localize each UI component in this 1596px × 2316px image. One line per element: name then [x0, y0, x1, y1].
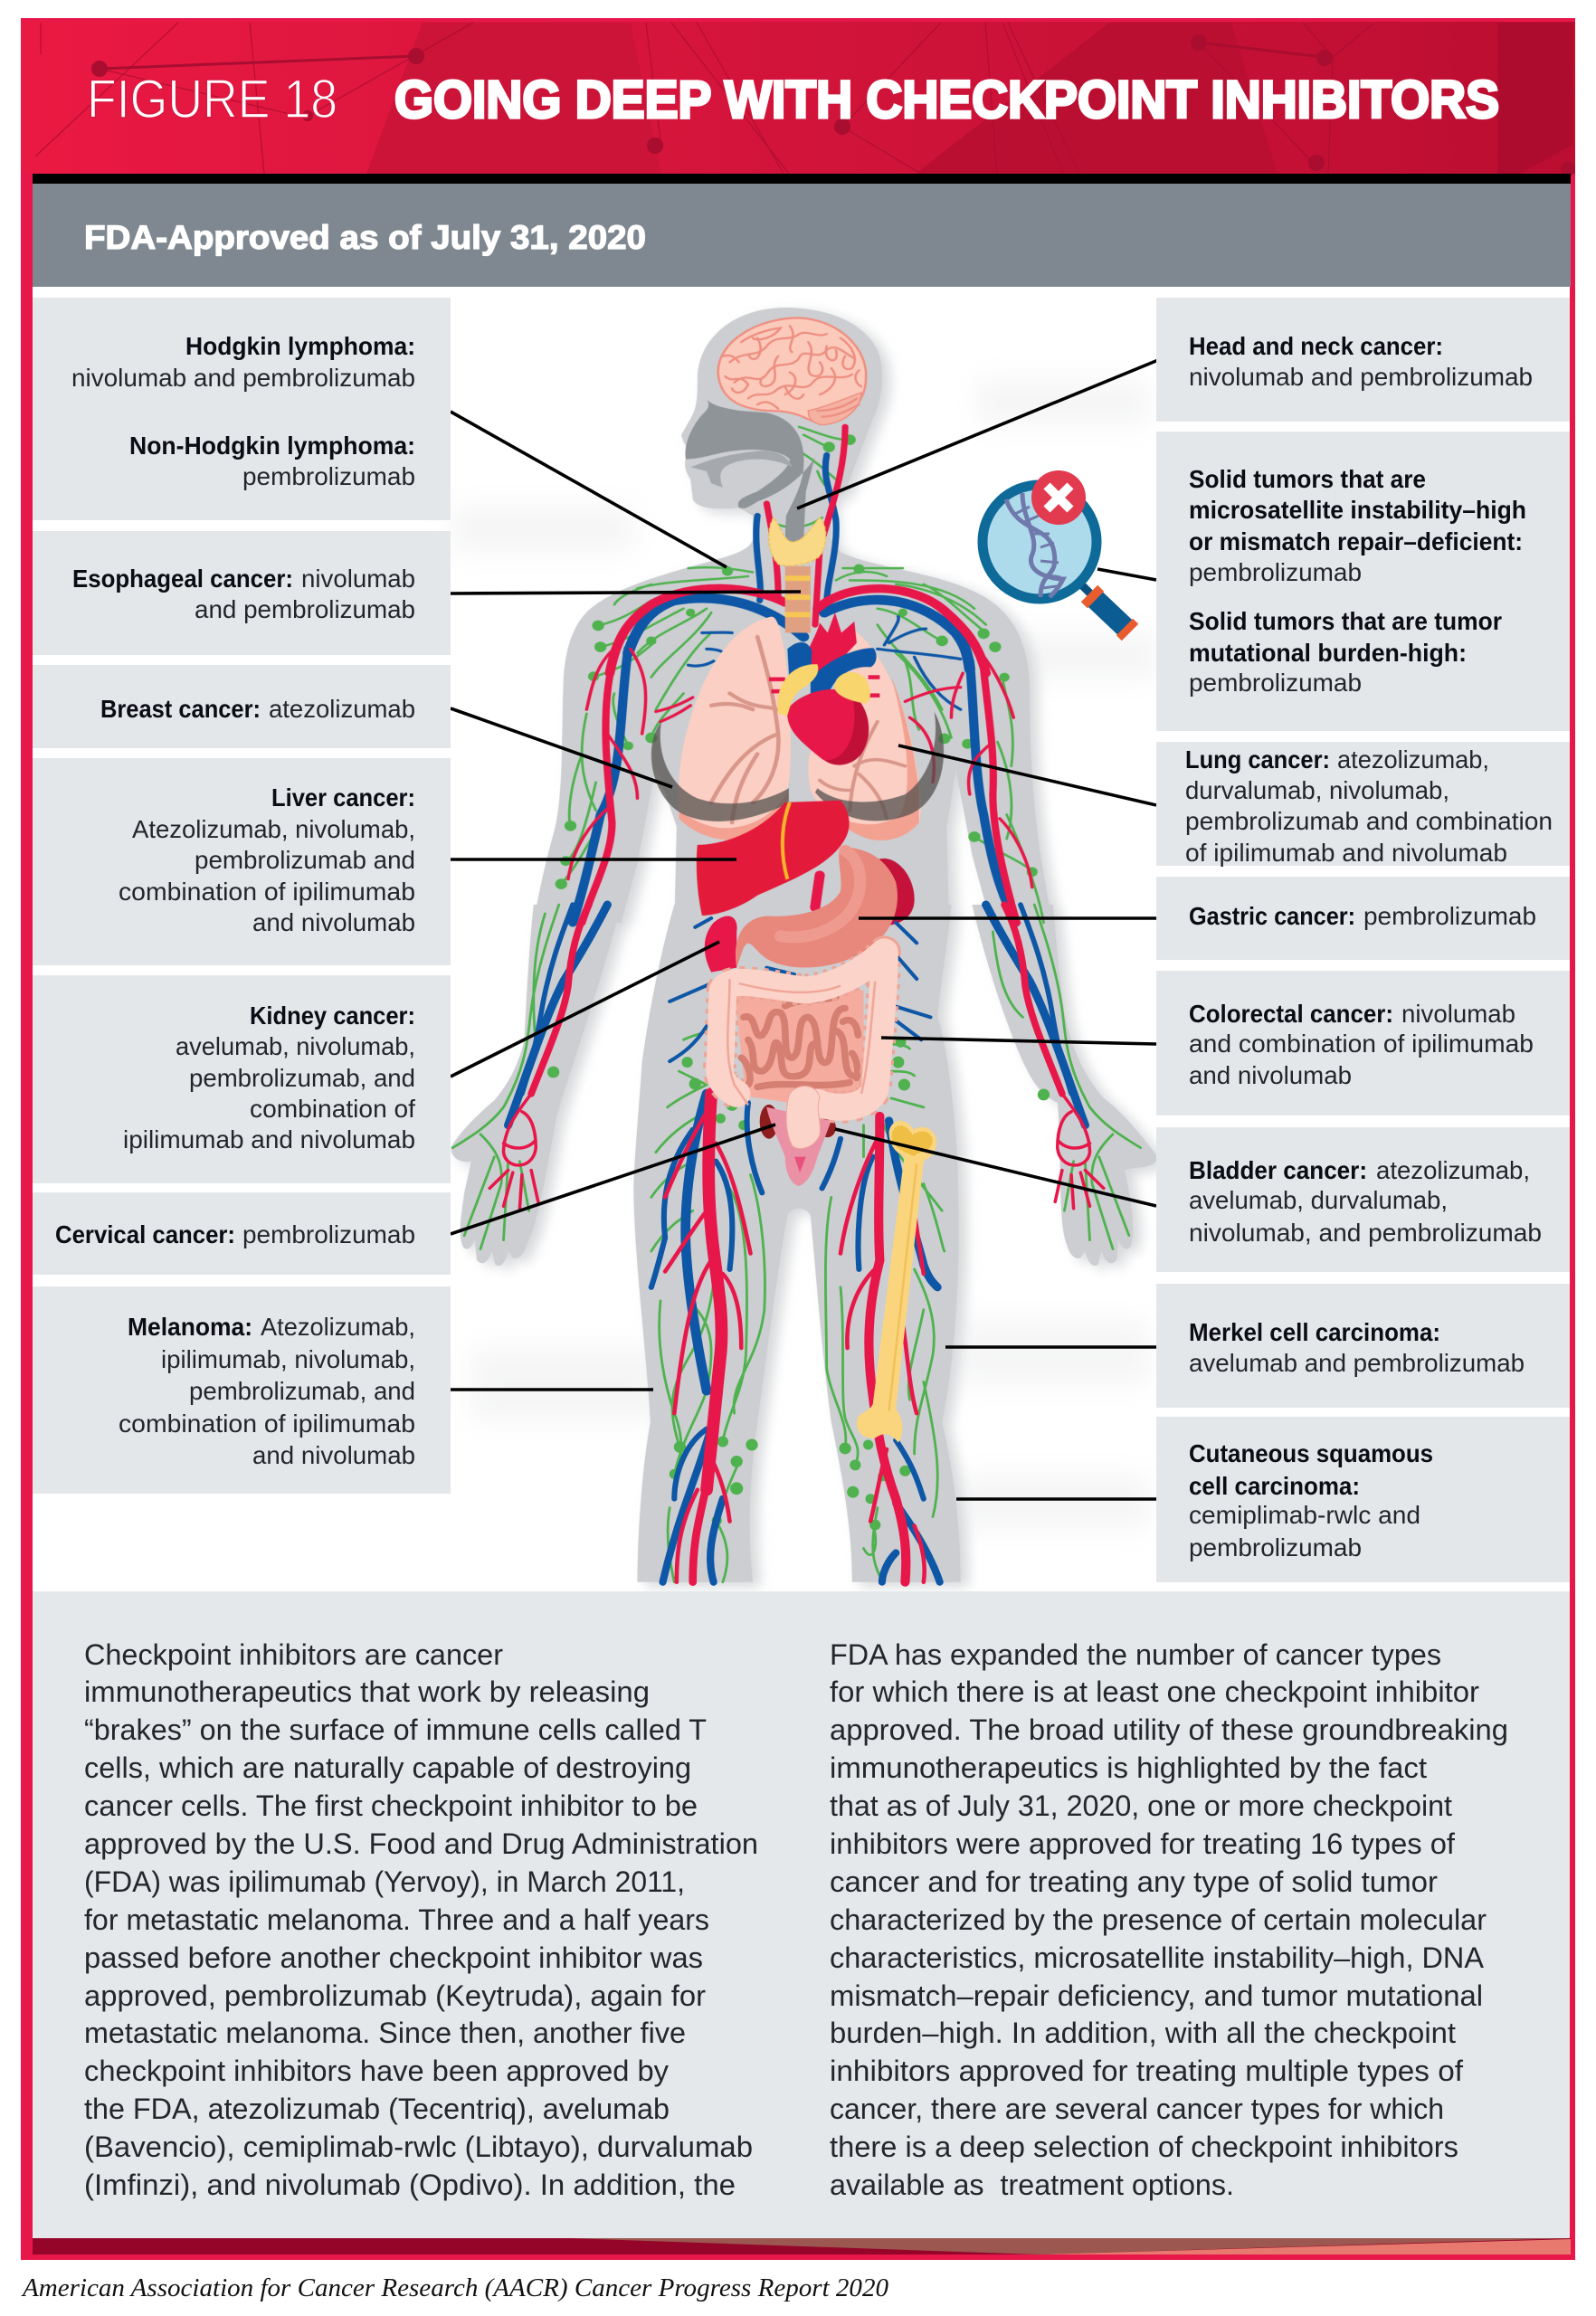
- callout line: solid tumors: [1097, 569, 1156, 580]
- text column: left: (Imfinzi), and nivolumab (Opdivo). In addition, the: [84, 2169, 736, 2201]
- text column: right: that as of July 31, 2020, one or more checkpoint: [830, 1789, 1452, 1822]
- cutaneous text: cell carcinoma:: [1189, 1472, 1360, 1500]
- panel: colorectal cancer: [1156, 971, 1570, 1115]
- text column: right: cancer and for treating any type of solid tumor: [830, 1865, 1438, 1898]
- lung text: atezolizumab,: [1337, 745, 1489, 774]
- panel: cervical cancer: [33, 1192, 451, 1275]
- illustration: human body: [451, 308, 1165, 1587]
- melanoma text: [119, 1313, 415, 1469]
- large intestine: [719, 952, 884, 1149]
- liver text: Atezolizumab, nivolumab,: [132, 815, 415, 843]
- lung text: of ipilimumab and nivolumab: [1185, 839, 1507, 867]
- lymphoma text: Non-Hodgkin lymphoma:: [129, 432, 415, 460]
- panel: bladder cancer: [1156, 1127, 1570, 1272]
- thyroid: [769, 517, 826, 565]
- upper lymph nodes: [556, 434, 1038, 889]
- icon: magnifying glass with DNA and red X: [983, 470, 1130, 632]
- header background with network pattern: [22, 22, 1575, 176]
- melanoma text: ipilimumab, nivolumab,: [161, 1345, 415, 1373]
- head and neck text: Head and neck cancer:: [1189, 332, 1443, 360]
- panel: cutaneous squamous cell carcinoma: [1156, 1417, 1570, 1582]
- callout line: Merkel cell: [945, 1345, 1156, 1349]
- melanoma text: pembrolizumab, and: [189, 1377, 415, 1405]
- figure label: FIGURE 18: [87, 69, 337, 129]
- head and neck text: nivolumab and pembrolizumab: [1189, 363, 1533, 391]
- panel: gastric cancer: [1156, 877, 1570, 960]
- cervical text: [55, 1220, 415, 1248]
- text column: left: “brakes” on the surface of immune cells called T: [84, 1713, 707, 1746]
- lower lymphatic vessels: [452, 905, 1141, 1582]
- liver text: [119, 783, 415, 936]
- kidney text: avelumab, nivolumab,: [176, 1032, 415, 1060]
- lower blue veins: [508, 905, 1085, 1582]
- red X badge: [1031, 470, 1086, 525]
- panel: lymphoma: [33, 298, 451, 520]
- panel: head and neck cancer: [1156, 298, 1570, 422]
- black divider bar: [33, 174, 1571, 184]
- melanoma text: and nivolumab: [252, 1441, 415, 1469]
- colorectal text: and nivolumab: [1189, 1061, 1352, 1089]
- text column: left: approved, pembrolizumab (Keytruda), again for: [84, 1979, 706, 2012]
- text column: right: FDA has expanded the number of cancer types: [830, 1638, 1441, 1671]
- femur bone: [857, 1121, 936, 1443]
- lower body vessels and organs: [452, 847, 1141, 1582]
- kidney text: [123, 1001, 415, 1153]
- callout line: cervical: [451, 1125, 775, 1234]
- brain: [718, 318, 866, 425]
- colorectal text: Colorectal cancer:: [1189, 1000, 1393, 1028]
- esophageal text: nivolumab: [301, 565, 415, 593]
- cervical text: Cervical cancer:: [55, 1220, 235, 1248]
- cervical text: pembrolizumab: [242, 1220, 415, 1248]
- subtitle band: [33, 184, 1571, 287]
- lymphoma text: Hodgkin lymphoma:: [185, 332, 415, 360]
- text column: right: characterized by the presence of certain molecular: [830, 1903, 1487, 1936]
- bladder text: avelumab, durvalumab,: [1189, 1186, 1448, 1214]
- solid tumors text: Solid tumors that are tumor: [1189, 607, 1502, 635]
- upper body organs and vessels: [556, 318, 1043, 925]
- lung text: [1185, 745, 1553, 867]
- solid tumors text: microsatellite instability–high: [1189, 496, 1526, 524]
- callout line: bladder: [835, 1129, 1156, 1206]
- head airways: [685, 399, 815, 542]
- bladder text: [1189, 1156, 1542, 1247]
- breast text: atezolizumab: [269, 695, 415, 723]
- gastric text: Gastric cancer:: [1189, 902, 1355, 930]
- breast text: [100, 695, 415, 723]
- panel: liver cancer: [33, 758, 451, 965]
- Merkel text: avelumab and pembrolizumab: [1189, 1349, 1525, 1377]
- esophageal text: Esophageal cancer:: [72, 565, 293, 593]
- head and neck text: [1189, 332, 1533, 391]
- text column: right: inhibitors approved for treating multiple types of: [830, 2055, 1463, 2087]
- small intestine: [735, 991, 863, 1105]
- text column: right: inhibitors were approved for treating 16 types of: [830, 1827, 1455, 1860]
- text column: left: approved by the U.S. Food and Drug Administration: [84, 1827, 758, 1860]
- solid tumors text: mutational burden-high:: [1189, 639, 1467, 667]
- panel: explanatory text: [33, 1591, 1570, 2238]
- callout line: melanoma: [451, 1388, 653, 1391]
- text column: left: the FDA, atezolizumab (Tecentriq), avelumab: [84, 2093, 670, 2125]
- background soft swooshes: [452, 380, 1158, 1529]
- body silhouette shadow: [459, 312, 1165, 1587]
- callout line: kidney: [451, 942, 719, 1077]
- text column: left: (Bavencio), cemiplimab-rwlc (Libtayo), durvalumab: [84, 2131, 753, 2163]
- text column: left: cancer cells. The first checkpoint inhibitor to be: [84, 1789, 698, 1822]
- callout line: liver: [451, 858, 736, 861]
- diaphragm: [651, 711, 944, 821]
- heart: [769, 612, 879, 765]
- lower lymph nodes: [547, 1037, 1050, 1531]
- text column: right: [830, 1638, 1508, 2201]
- bladder text: nivolumab, and pembrolizumab: [1189, 1219, 1542, 1247]
- upper lymphatic vessels: [561, 427, 1043, 923]
- solid tumors text: [1189, 465, 1526, 697]
- trachea: [785, 566, 811, 632]
- text column: right: cancer, there are several cancer types for which: [830, 2093, 1444, 2125]
- melanoma text: combination of ipilimumab: [119, 1410, 415, 1438]
- lung text: durvalumab, nivolumab,: [1185, 776, 1449, 804]
- esophageal text: [72, 565, 415, 623]
- panel: melanoma: [33, 1286, 451, 1494]
- lung text: Lung cancer:: [1185, 745, 1330, 774]
- cutaneous text: Cutaneous squamous: [1189, 1439, 1433, 1467]
- subtitle text: FDA-Approved as of July 31, 2020: [84, 219, 646, 256]
- text column: right: available as treatment options.: [830, 2169, 1234, 2201]
- DNA helix: [1006, 493, 1063, 597]
- kidney text: ipilimumab and nivolumab: [123, 1125, 415, 1153]
- text column: left: [84, 1638, 758, 2201]
- liver: [697, 801, 850, 916]
- text column: left: passed before another checkpoint inhibitor was: [84, 1941, 703, 1974]
- lymphoma text: [71, 332, 415, 490]
- lens: [983, 485, 1097, 599]
- solid tumors text: or mismatch repair–deficient:: [1189, 527, 1523, 555]
- text column: right: for which there is at least one checkpoint inhibitor: [830, 1675, 1479, 1708]
- cutaneous text: cemiplimab-rwlc and: [1189, 1501, 1420, 1529]
- text column: right: burden–high. In addition, with all the checkpoint: [830, 2017, 1456, 2049]
- left kidney: [705, 916, 737, 973]
- text column: left: immunotherapeutics that work by releasing: [84, 1675, 650, 1708]
- panel: esophageal cancer: [33, 531, 451, 655]
- gastric text: pembrolizumab: [1363, 902, 1536, 930]
- text column: left: (FDA) was ipilimumab (Yervoy), in March 2011,: [84, 1865, 685, 1898]
- text column: left: checkpoint inhibitors have been approved by: [84, 2055, 669, 2087]
- melanoma text: Atezolizumab,: [261, 1313, 415, 1341]
- kidney text: Kidney cancer:: [250, 1001, 415, 1030]
- callout line: lymphoma: [451, 412, 727, 567]
- colorectal text: and combination of ipilimumab: [1189, 1030, 1534, 1058]
- upper blue veins: [573, 455, 1016, 923]
- liver text: pembrolizumab and: [195, 846, 415, 874]
- liver text: Liver cancer:: [271, 783, 415, 812]
- panel: solid tumors: [1156, 432, 1570, 731]
- callout line: esophageal: [451, 592, 801, 593]
- liver text: combination of ipilimumab: [119, 878, 415, 906]
- solid tumors text: Solid tumors that are: [1189, 465, 1426, 493]
- breast text: Breast cancer:: [100, 695, 261, 723]
- text column: left: cells, which are naturally capable of destroying: [84, 1751, 691, 1784]
- cutaneous text: pembrolizumab: [1189, 1533, 1362, 1561]
- callout line: cutaneous squamous: [956, 1497, 1156, 1501]
- kidney text: pembrolizumab, and: [189, 1064, 415, 1092]
- liver text: and nivolumab: [252, 908, 415, 936]
- Merkel text: Merkel cell carcinoma:: [1189, 1318, 1440, 1346]
- source credit: American Association for Cancer Research (AACR) Cancer Progress Report 2020: [21, 2274, 888, 2302]
- stomach: [736, 847, 898, 968]
- upper red arteries: [568, 427, 1032, 923]
- callout line: colorectal: [881, 1038, 1156, 1044]
- text column: right: mismatch–repair deficiency, and tumor mutational: [830, 1979, 1483, 2012]
- lymphoma text: pembrolizumab: [242, 462, 415, 490]
- title: GOING DEEP WITH CHECKPOINT INHIBITORS: [394, 71, 1499, 129]
- colorectal text: nivolumab: [1401, 1000, 1515, 1028]
- lungs: [679, 617, 921, 840]
- panel: Merkel cell carcinoma: [1156, 1284, 1570, 1408]
- lung text: pembrolizumab and combination: [1185, 807, 1553, 835]
- bladder text: atezolizumab,: [1376, 1156, 1530, 1184]
- spleen: [872, 859, 915, 925]
- lymphoma text: nivolumab and pembrolizumab: [71, 364, 415, 392]
- callout line: head and neck: [797, 360, 1158, 508]
- esophageal text: and pembrolizumab: [195, 595, 415, 623]
- text column: right: immunotherapeutics is highlighted by the fact: [830, 1751, 1427, 1784]
- text column: right: there is a deep selection of checkpoint inhibitors: [830, 2131, 1458, 2163]
- bladder and reproductive organs: [760, 1105, 836, 1186]
- callout line: breast: [451, 708, 672, 787]
- cutaneous text: [1189, 1439, 1433, 1561]
- text column: right: approved. The broad utility of these groundbreaking: [830, 1713, 1508, 1746]
- lower red arteries: [489, 905, 1104, 1582]
- solid tumors text: pembrolizumab: [1189, 669, 1362, 697]
- solid tumors text: pembrolizumab: [1189, 558, 1362, 586]
- callout line: gastric: [859, 916, 1156, 920]
- bottom band: [33, 2238, 1571, 2254]
- bladder text: Bladder cancer:: [1189, 1156, 1367, 1184]
- panel: breast cancer: [33, 665, 451, 748]
- kidney text: combination of: [250, 1095, 415, 1123]
- text column: left: for metastatic melanoma. Three and a half years: [84, 1903, 709, 1936]
- handle: [1081, 584, 1130, 632]
- colorectal text: [1189, 1000, 1534, 1089]
- panel: kidney cancer: [33, 975, 451, 1183]
- body silhouette: [451, 308, 1157, 1582]
- callout line: lung: [898, 745, 1156, 805]
- panel: lung cancer: [1156, 742, 1570, 867]
- Merkel text: [1189, 1318, 1525, 1377]
- melanoma text: Melanoma:: [128, 1313, 252, 1341]
- text column: left: Checkpoint inhibitors are cancer: [84, 1638, 503, 1671]
- header banner: [22, 22, 1575, 176]
- text column: right: characteristics, microsatellite instability–high, DNA: [830, 1941, 1485, 1974]
- gastric text: [1189, 902, 1536, 930]
- text column: left: metastatic melanoma. Since then, another five: [84, 2017, 686, 2049]
